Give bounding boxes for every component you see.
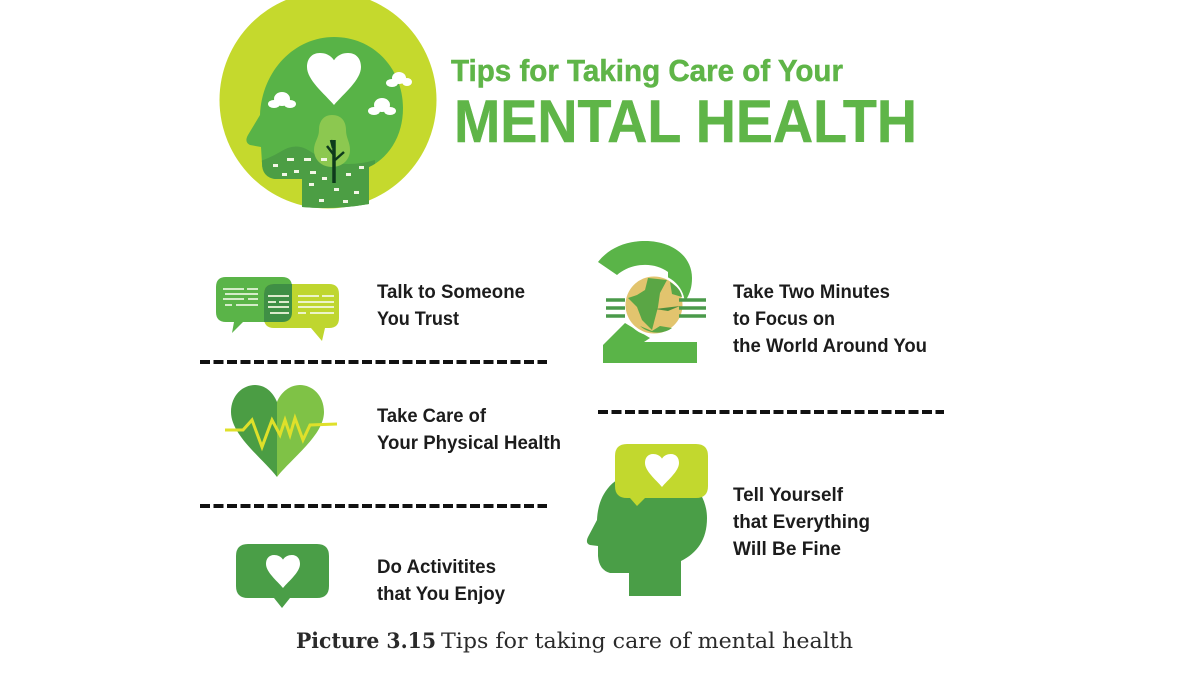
label: physical health bbox=[377, 406, 561, 454]
label: activities: Do Activitites bbox=[377, 557, 496, 578]
label: physical health: Take Care of bbox=[377, 406, 487, 427]
title: MENTAL HEALTH bbox=[454, 88, 917, 155]
icon: head with heart bubble bbox=[587, 444, 708, 596]
label: physical health: Your Physical Health bbox=[377, 433, 561, 454]
label: two minutes bbox=[733, 282, 927, 357]
label: tell yourself: that Everything bbox=[733, 512, 870, 533]
label: two minutes: Take Two Minutes bbox=[733, 282, 890, 303]
caption bbox=[296, 628, 853, 653]
label: talk to someone: Talk to Someone bbox=[377, 282, 525, 303]
label: two minutes: the World Around You bbox=[733, 336, 927, 357]
icon: heart speech bubble bbox=[236, 544, 329, 608]
icon: speech bubbles bbox=[216, 277, 339, 341]
icon: heart with pulse bbox=[225, 385, 337, 477]
label: talk to someone bbox=[377, 282, 525, 330]
label: activities bbox=[377, 557, 505, 605]
label: tell yourself bbox=[733, 485, 870, 560]
caption: Tips for taking care of mental health bbox=[441, 629, 853, 653]
label: tell yourself: Will Be Fine bbox=[733, 539, 841, 560]
icon: head with heart in lime circle bbox=[220, 0, 436, 215]
label: tell yourself: Tell Yourself bbox=[733, 485, 844, 506]
icon: number two with globe bbox=[598, 241, 706, 363]
title: Tips for Taking Care of Your bbox=[451, 53, 843, 88]
label: activities: that You Enjoy bbox=[377, 584, 505, 605]
label: talk to someone: You Trust bbox=[377, 309, 460, 330]
title bbox=[451, 53, 917, 155]
label: two minutes: to Focus on bbox=[733, 309, 835, 330]
caption: Picture 3.15 bbox=[296, 628, 436, 653]
